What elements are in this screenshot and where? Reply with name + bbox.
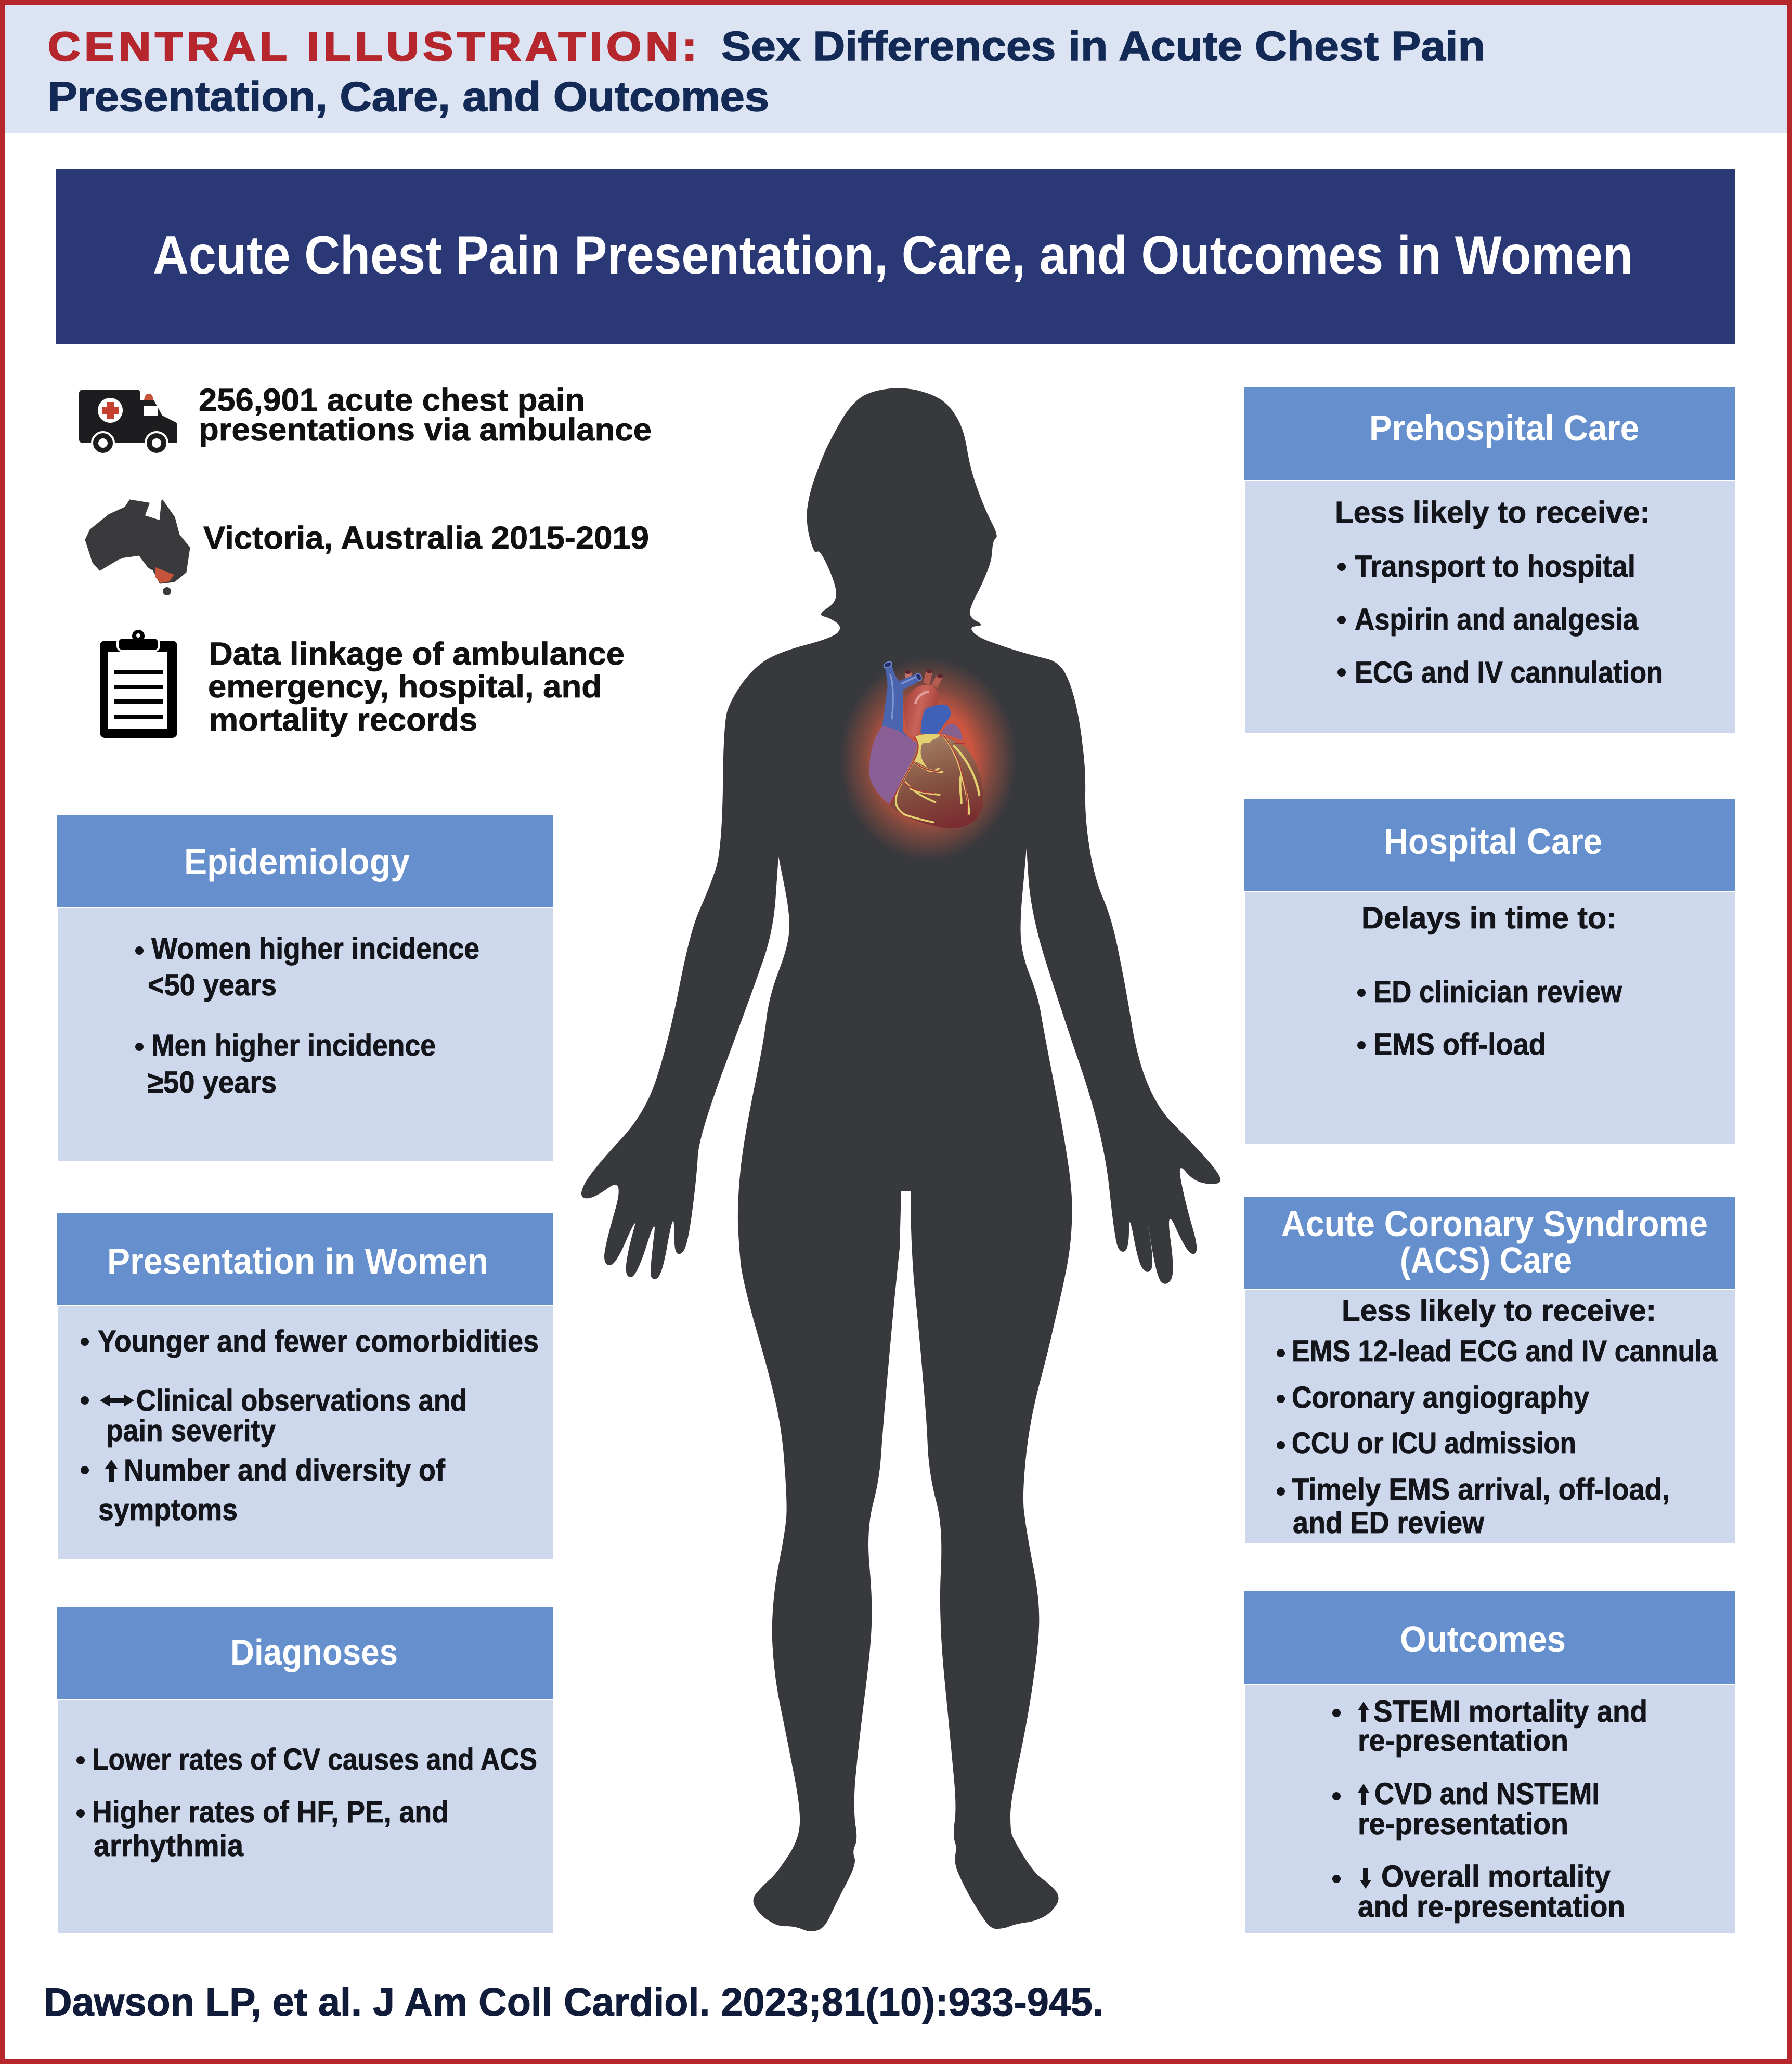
panel body: outcomes: [1245, 1685, 1735, 1933]
text: location and years: Victoria, Australia 2015-2019: [203, 520, 649, 555]
panel body: ACS care: Timely EMS arrival, off-load,: [1292, 1473, 1670, 1507]
panel body: presentation in women: Clinical observations and: [136, 1384, 467, 1418]
panel body: epidemiology: <50 years: [148, 968, 277, 1002]
panel body: ACS care: and ED review: [1293, 1506, 1485, 1540]
panel: prehospital care: [1244, 387, 1735, 733]
heading: central illustration title: [48, 23, 1485, 120]
panel body: diagnoses: Higher rates of HF, PE, and: [92, 1795, 449, 1829]
heading: central illustration title: CENTRAL ILLUSTRATION:: [48, 23, 701, 69]
panel body: diagnoses: arrhythmia: [94, 1829, 244, 1863]
glow behind heart: [840, 658, 1017, 861]
panel body: hospital care: [1245, 892, 1735, 1144]
header band: [5, 5, 1787, 133]
panel body: diagnoses: Lower rates of CV causes and ACS: [92, 1743, 537, 1776]
panel body: presentation in women: pain severity: [106, 1414, 276, 1448]
panel body: ACS care: EMS 12-lead ECG and IV cannula: [1292, 1334, 1718, 1368]
panel body: outcomes: STEMI mortality and: [1373, 1695, 1647, 1729]
panel body: ACS care: CCU or ICU admission: [1292, 1426, 1576, 1460]
panel: outcomes: [1244, 1591, 1735, 1933]
panel body: outcomes: Overall mortality: [1381, 1860, 1611, 1893]
panel body: ACS care: Less likely to receive:: [1342, 1294, 1656, 1328]
panel header: ACS care: (ACS) Care: [1400, 1240, 1572, 1280]
text: data linkage: [208, 636, 625, 737]
panel body: epidemiology: Women higher incidence: [151, 932, 479, 966]
title bar: Acute Chest Pain Presentation, Care, and Outcomes in Women: [153, 225, 1633, 285]
panel body: presentation in women: symptoms: [98, 1493, 238, 1527]
title bar: [56, 169, 1735, 344]
panel: epidemiology: [57, 815, 553, 1161]
icon: anatomical heart: [869, 660, 983, 828]
panel body: outcomes: CVD and NSTEMI: [1374, 1777, 1600, 1811]
panel body: prehospital care: Transport to hospital: [1355, 550, 1635, 583]
panel body: prehospital care: ECG and IV cannulation: [1355, 656, 1663, 690]
panel body: hospital care: Delays in time to:: [1361, 901, 1617, 935]
text: presentations count: presentations via ambulance: [199, 412, 652, 447]
panel body: hospital care: ED clinician review: [1373, 975, 1622, 1009]
panel body: epidemiology: ≥50 years: [148, 1066, 277, 1099]
panel header: epidemiology: Epidemiology: [184, 841, 410, 882]
panel header: ACS care: [1244, 1197, 1735, 1289]
panel body: ACS care: Coronary angiography: [1292, 1381, 1589, 1414]
panel body: ACS care: [1245, 1290, 1735, 1543]
panel body: outcomes: re-presentation: [1358, 1724, 1568, 1758]
text: presentations count: 256,901 acute chest pain: [199, 382, 585, 418]
panel header: epidemiology: [57, 815, 553, 907]
panel body: outcomes: and re-presentation: [1358, 1890, 1625, 1924]
heading: central illustration title: Sex Differences in Acute Chest Pain: [721, 23, 1485, 69]
panel header: hospital care: [1244, 799, 1735, 891]
panel: acute coronary syndrome care: [1244, 1197, 1735, 1543]
panel header: prehospital care: Prehospital Care: [1369, 408, 1639, 448]
panel body: presentation in women: Number and diversity of: [124, 1453, 446, 1487]
panel body: epidemiology: Men higher incidence: [151, 1029, 436, 1062]
panel body: outcomes: re-presentation: [1358, 1807, 1568, 1841]
panel: hospital care: [1244, 799, 1735, 1144]
panel: presentation in women: [57, 1213, 553, 1559]
panel header: prehospital care: [1244, 387, 1735, 480]
panel header: presentation in women: Presentation in Women: [107, 1241, 488, 1281]
panel body: hospital care: EMS off-load: [1373, 1028, 1546, 1061]
panel body: presentation in women: Younger and fewer comorbidities: [98, 1325, 539, 1358]
panel body: prehospital care: Less likely to receive:: [1335, 496, 1650, 529]
icon: clipboard: [100, 630, 177, 738]
panel header: presentation in women: [57, 1213, 553, 1305]
text: data linkage: emergency, hospital, and: [208, 669, 602, 704]
silhouette of a woman: [581, 388, 1220, 1931]
icon: up arrow: [105, 1460, 118, 1482]
text: presentations count: [199, 382, 652, 447]
panel header: ACS care: Acute Coronary Syndrome: [1281, 1203, 1708, 1244]
panel header: outcomes: Outcomes: [1400, 1619, 1566, 1659]
panel header: diagnoses: [57, 1607, 553, 1699]
icon: ambulance: [79, 390, 177, 454]
panel header: hospital care: Hospital Care: [1384, 821, 1602, 862]
icon: map of Australia: [86, 500, 189, 595]
text: data linkage: mortality records: [209, 702, 477, 737]
heading: central illustration title: Presentation, Care, and Outcomes: [48, 73, 769, 120]
panel: diagnoses: [57, 1607, 553, 1933]
citation: Dawson LP, et al. J Am Coll Cardiol. 2023;81(10):933-945.: [44, 1980, 1103, 2024]
panel header: diagnoses: Diagnoses: [230, 1632, 398, 1672]
text: data linkage: Data linkage of ambulance: [209, 636, 625, 671]
panel body: prehospital care: Aspirin and analgesia: [1355, 603, 1639, 637]
panel body: epidemiology: [58, 908, 553, 1161]
panel body: prehospital care: [1245, 481, 1735, 733]
icon: left-right arrow: [100, 1394, 134, 1407]
panel header: outcomes: [1244, 1591, 1735, 1684]
panel body: diagnoses: [58, 1700, 553, 1933]
panel body: presentation in women: [58, 1306, 553, 1559]
